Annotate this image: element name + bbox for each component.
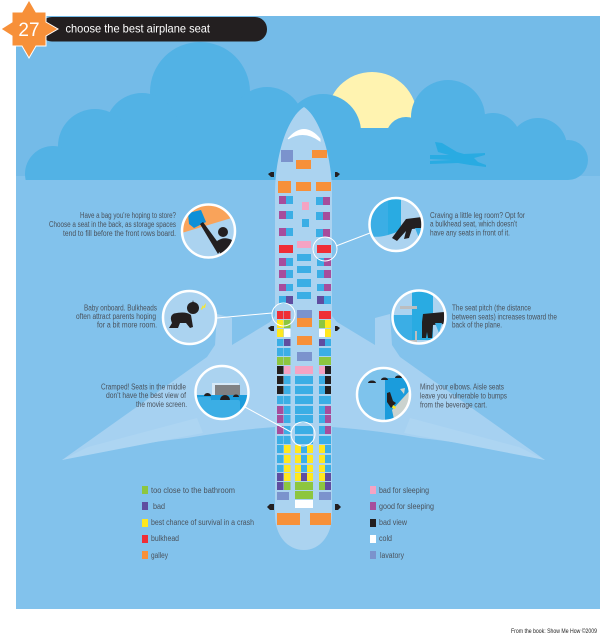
legend: right column: bad view — [379, 518, 407, 527]
legend: left column: best chance of survival in a crash — [151, 518, 254, 527]
text: baby tip: Baby onboard. Bulkheads — [84, 304, 157, 312]
legend: left column: bulkhead — [151, 534, 179, 543]
text: middle seats tip: the movie screen. — [136, 400, 187, 409]
text: seat pitch tip: back of the plane. — [452, 320, 502, 330]
text: leg room tip — [430, 211, 525, 238]
right wing — [332, 314, 545, 460]
sun — [327, 72, 417, 162]
legend: left column: bad — [153, 502, 165, 511]
text: seat pitch tip: The seat pitch (the distance — [452, 304, 531, 312]
text: storage tip: Have a bag you're hoping to store? — [80, 211, 176, 220]
text: aisle elbow tip: leave you vulnerable to bumps — [420, 392, 507, 400]
text: aisle elbow tip: from the beverage cart. — [420, 400, 487, 410]
text: aisle elbow tip: Mind your elbows. Aisle seats — [420, 382, 504, 392]
legend: right column: good for sleeping — [379, 502, 434, 511]
icon: aisle elbow bump — [356, 368, 412, 425]
text: leg room tip: Craving a little leg room? Opt for — [430, 211, 525, 220]
legend: right column: bad for sleeping — [379, 486, 429, 495]
cockpit windshield — [288, 130, 320, 141]
text: storage tip — [49, 211, 176, 238]
legend: right column — [370, 486, 434, 560]
seat highlight circles and leader lines — [217, 233, 370, 446]
title bar: choose the best airplane seat — [66, 22, 211, 36]
clouds — [25, 42, 588, 180]
icon: seat pitch — [391, 288, 446, 344]
small plane silhouette in the clouds — [430, 142, 486, 167]
left wing — [62, 314, 275, 460]
left wing flap — [62, 418, 203, 460]
legend: left column — [142, 486, 254, 560]
icon: baby in bulkhead seat — [163, 291, 216, 344]
fuselage — [275, 107, 332, 550]
text: seat pitch tip: between seats) increases toward the — [452, 312, 557, 322]
right wing flap — [404, 418, 545, 460]
text: middle seats tip: Cramped! Seats in the middle — [101, 382, 186, 392]
text: middle seats tip — [101, 382, 187, 409]
text: storage tip: tend to fill before the front rows board. — [63, 229, 176, 238]
legend: left column: galley — [151, 551, 168, 560]
legend: right column: cold — [379, 534, 392, 543]
text: seat pitch tip — [452, 304, 557, 330]
title bar — [40, 17, 267, 42]
front cabin: lavatory and galleys — [278, 150, 331, 193]
text: aisle elbow tip — [420, 382, 507, 410]
text: storage tip: Choose a seat in the back, as storage spaces — [49, 220, 176, 229]
mid cabin seat rows — [277, 310, 331, 365]
engine markers — [267, 172, 341, 510]
text: leg room tip: a bulkhead seat, which doesn't — [430, 220, 518, 228]
legend: left column: too close to the bathroom — [151, 486, 235, 495]
rear lavatories, cold row and galleys — [277, 491, 331, 525]
text: baby tip: for a bit more room. — [97, 320, 157, 330]
seat map — [277, 150, 331, 525]
number badge — [1, 0, 58, 58]
text: middle seats tip: don't have the best view of — [106, 391, 187, 400]
rear cabin seat rows — [277, 366, 331, 490]
front seat rows — [279, 196, 331, 304]
number badge: 27 — [18, 20, 40, 41]
icon: bulkhead leg room — [368, 196, 422, 251]
legend: right column: lavatory — [380, 551, 404, 560]
text: baby tip — [76, 304, 157, 330]
text: leg room tip: have any seats in front of it. — [430, 228, 510, 238]
text: baby tip: often attract parents hoping — [76, 312, 156, 321]
icon: overhead storage — [180, 200, 240, 258]
icon: middle seats and movie screen — [196, 366, 248, 421]
